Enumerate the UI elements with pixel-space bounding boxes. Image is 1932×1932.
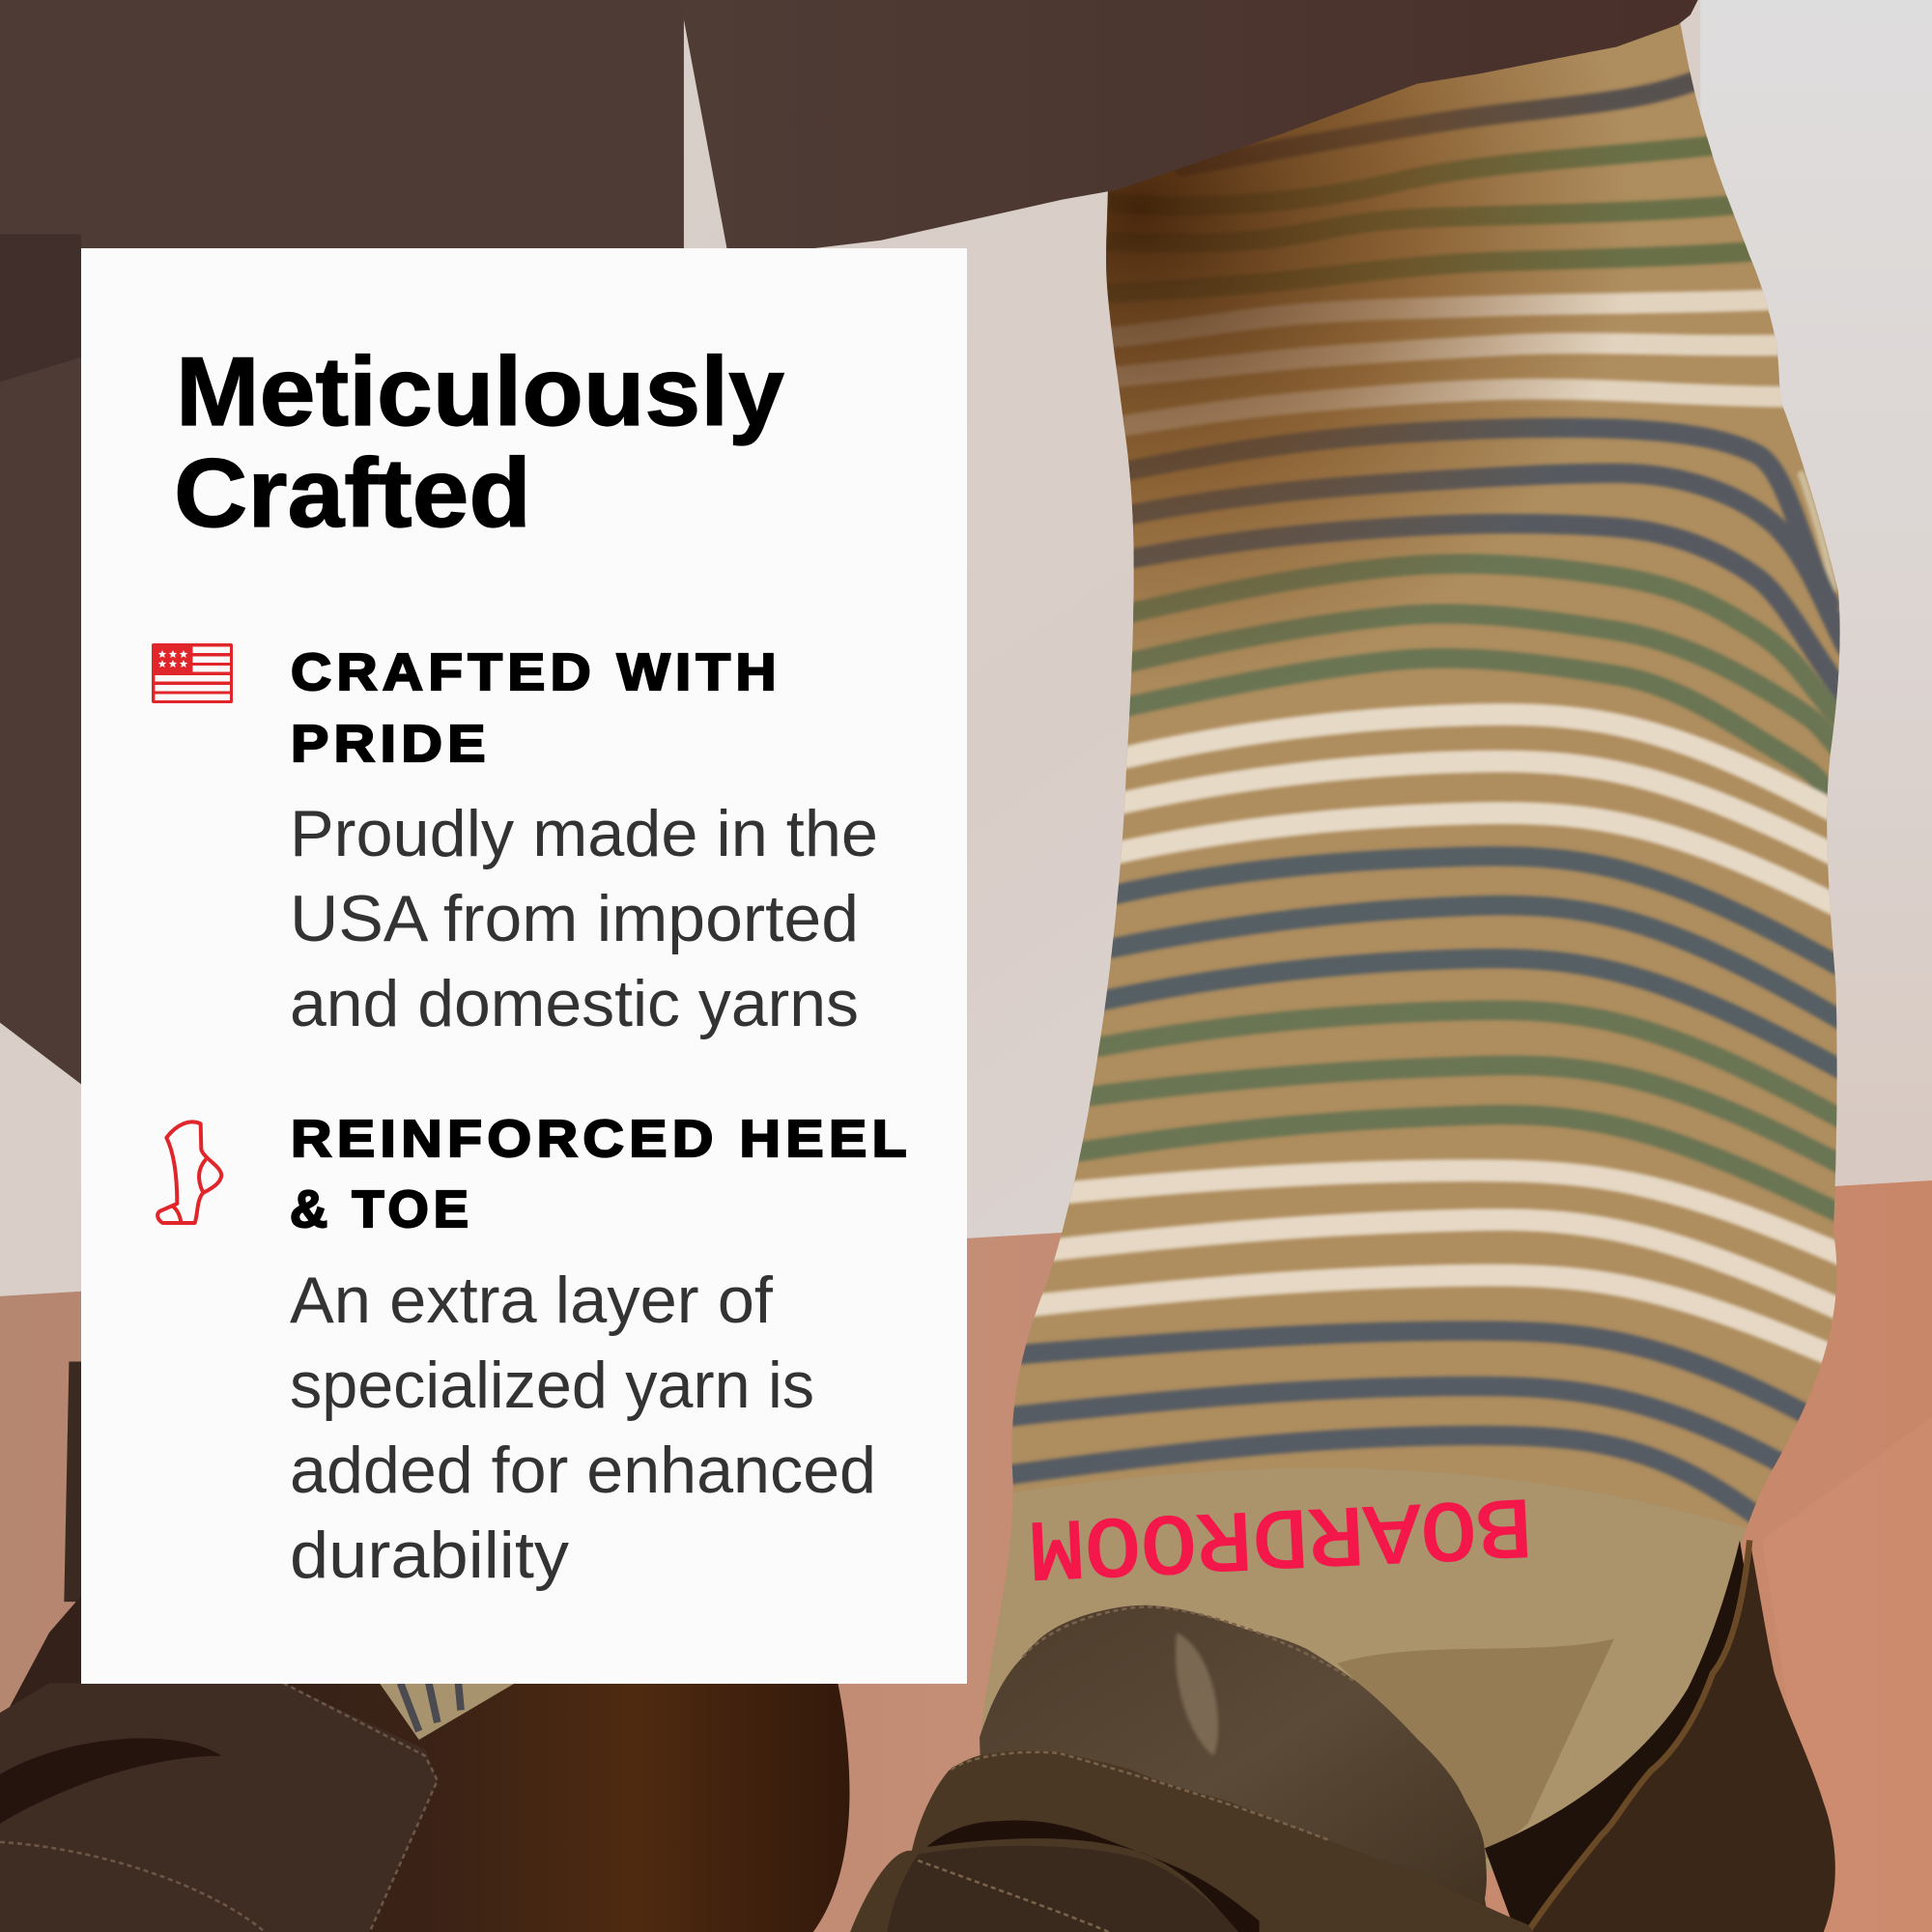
sock toe colour xyxy=(981,1468,1747,1872)
shoe stitching xyxy=(918,1606,1355,1932)
panel: white card xyxy=(81,248,967,1684)
text: reinforced heel and toe body: An extra layer of xyxy=(290,1264,773,1337)
shoe vamp xyxy=(887,1846,1238,1932)
shoe apron xyxy=(850,1750,1534,1932)
left shoe slot xyxy=(0,1739,222,1824)
text: reinforced heel and toe body: specialized yarn is xyxy=(290,1349,814,1422)
text: crafted with pride body xyxy=(290,797,878,1040)
sock logo: BOARDROOM xyxy=(1026,1474,1534,1594)
shoe tongue highlight xyxy=(1176,1633,1218,1756)
left shoe sliver xyxy=(64,1361,81,1602)
card background xyxy=(81,248,967,1684)
top shading xyxy=(1106,58,1604,651)
right shoe heel and inner xyxy=(1485,1540,1835,1932)
heading: crafted with pride: PRIDE xyxy=(291,715,491,773)
right wall xyxy=(1700,0,1932,1195)
trouser fold xyxy=(0,234,81,382)
left shoe stitching xyxy=(0,1683,438,1932)
crossed trouser leg xyxy=(680,0,1698,255)
text: reinforced heel and toe body: durability xyxy=(290,1519,569,1592)
wooden floor xyxy=(0,1180,1932,1932)
stripes xyxy=(1007,79,1852,1518)
text: reinforced heel and toe body xyxy=(290,1264,876,1592)
text: crafted with pride body: Proudly made in the xyxy=(290,797,878,870)
icon: american flag xyxy=(152,643,233,703)
left shoe xyxy=(0,1596,849,1932)
heading: reinforced heel and toe: & TOE xyxy=(290,1180,473,1238)
heading: reinforced heel and toe: REINFORCED HEEL xyxy=(291,1110,912,1168)
heading: crafted with pride: CRAFTED WITH xyxy=(291,643,781,701)
left sock peek xyxy=(380,1683,515,1740)
shoe strap slot xyxy=(926,1821,1260,1932)
text: crafted with pride body: and domestic yarns xyxy=(290,967,859,1040)
floor highlight xyxy=(1762,1417,1932,1932)
right shoe body xyxy=(980,1605,1491,1932)
title: Meticulously xyxy=(176,338,784,446)
sock edge fold xyxy=(1802,474,1833,589)
reinforced toe patch xyxy=(1337,1638,1614,1861)
sock base xyxy=(1012,23,1840,1528)
text: reinforced heel and toe body: added for enhanced xyxy=(290,1434,876,1507)
title xyxy=(174,338,784,548)
text: crafted with pride body: USA from imported xyxy=(290,882,859,955)
title: Crafted xyxy=(174,440,531,548)
left trouser leg xyxy=(0,0,684,1084)
heading: reinforced heel and toe xyxy=(290,1110,912,1238)
heading: crafted with pride xyxy=(291,643,781,773)
icon: sock heel and toe xyxy=(157,1122,221,1223)
left shoe strap xyxy=(0,1683,438,1932)
wall xyxy=(0,0,1932,1355)
striped sock xyxy=(961,0,1873,1932)
